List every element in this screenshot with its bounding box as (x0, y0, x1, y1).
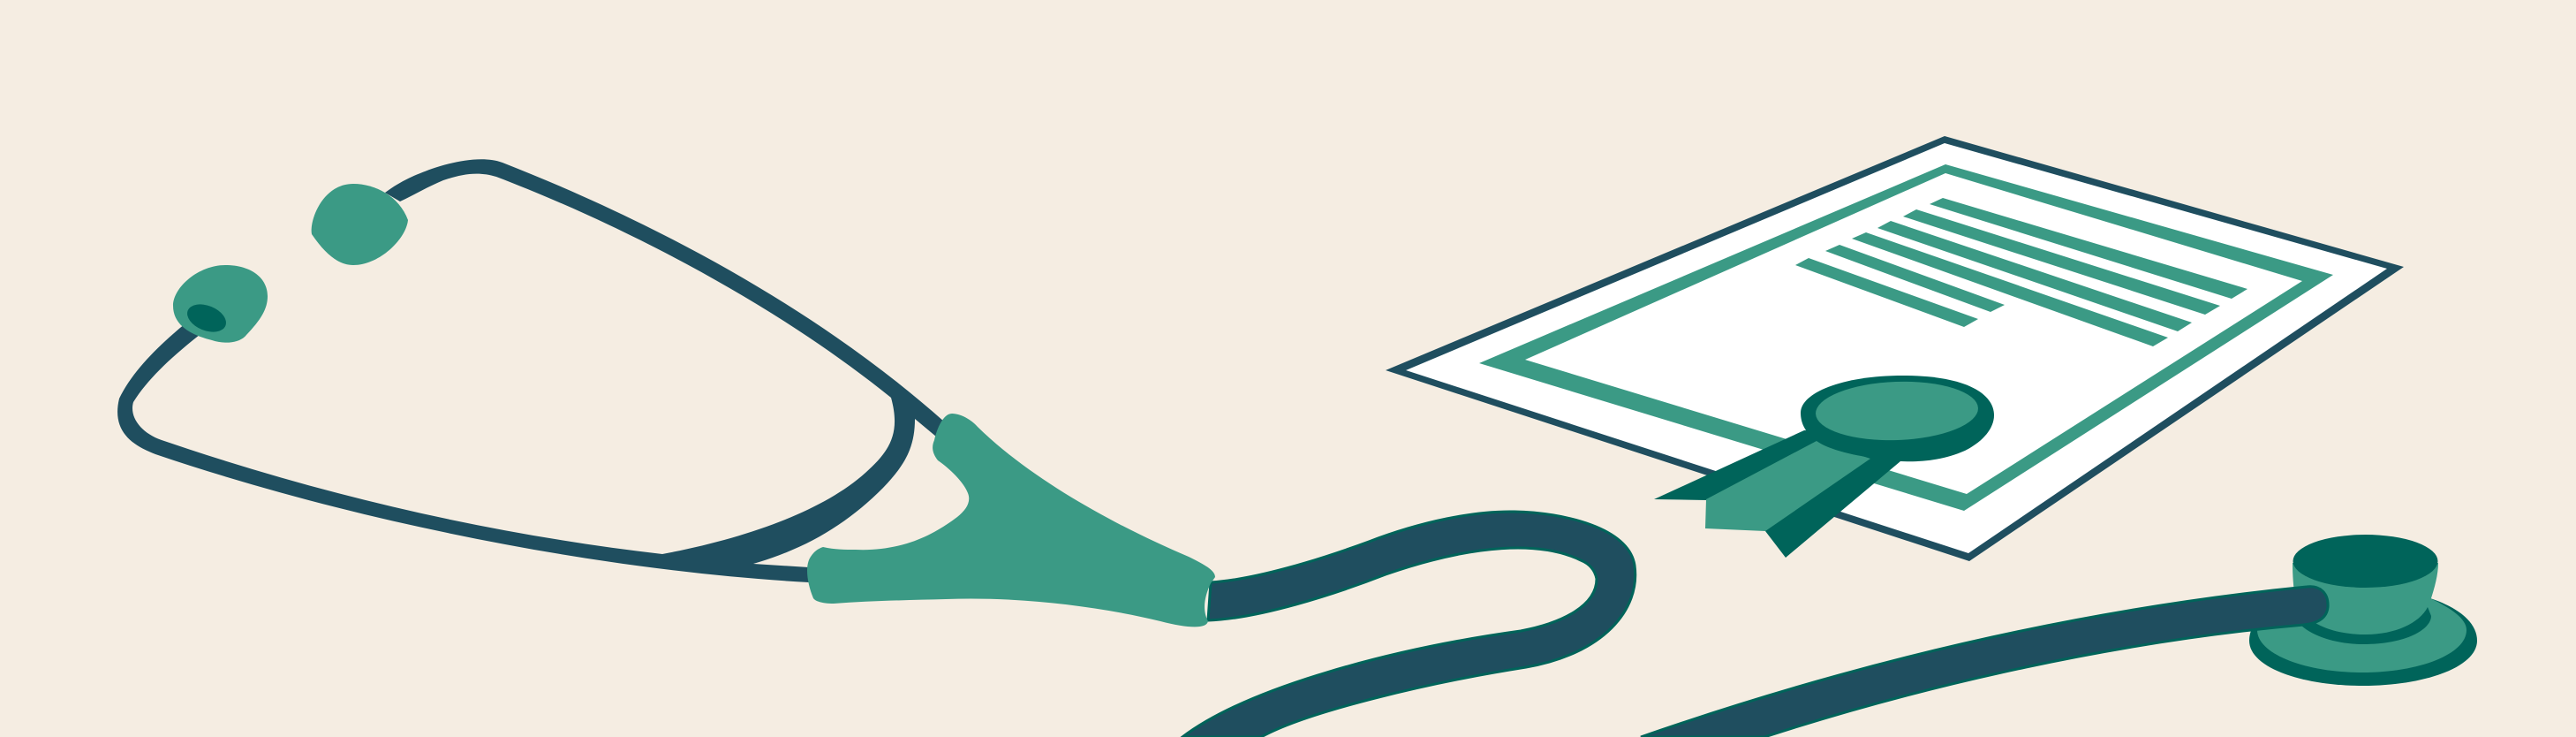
lower right tube (1641, 587, 2328, 737)
certificate text lines (1795, 198, 2247, 346)
chest piece (2249, 535, 2477, 686)
chest piece top (2293, 535, 2437, 588)
ribbon seal (1654, 376, 1994, 558)
certificate paper (1386, 136, 2404, 561)
certificate inner frame (1479, 164, 2333, 511)
ear tip: upper (312, 184, 408, 265)
middle tube (1182, 512, 1635, 737)
ear tip: lower (173, 265, 268, 343)
upper tube loop (117, 159, 944, 582)
chest piece stem (2293, 563, 2438, 644)
chest piece base (2249, 598, 2477, 686)
certificate (1386, 136, 2404, 561)
tube junction (807, 414, 1215, 627)
ear bud (183, 299, 230, 338)
